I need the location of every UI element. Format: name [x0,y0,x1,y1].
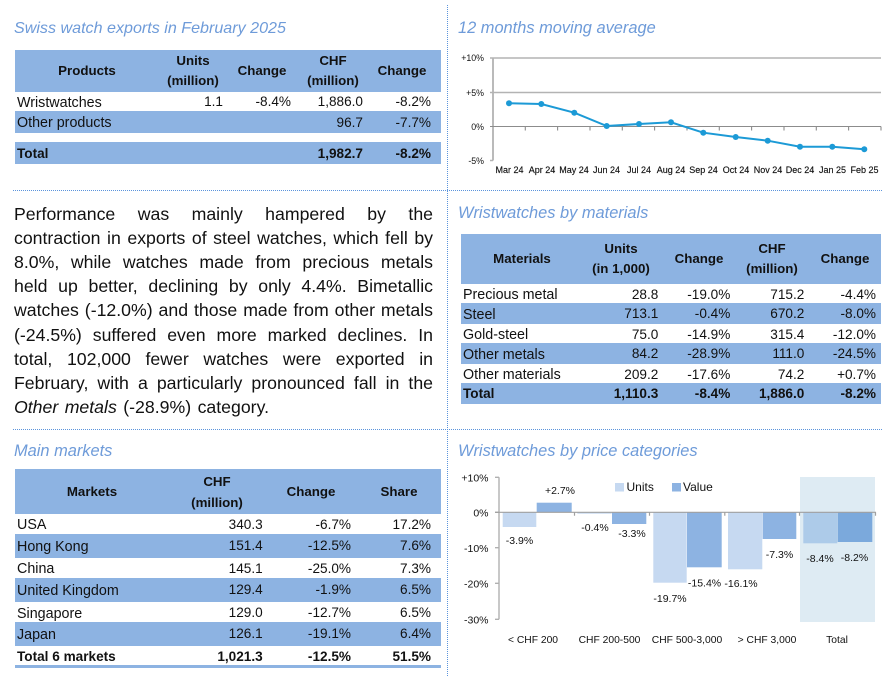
row: China: 145.1 [229,561,263,576]
row: Other materials: 209.2 [624,367,658,382]
line chart: 12 months moving average: Jan 25 [819,165,846,175]
table header row: Units [176,53,210,68]
table header row: Share [381,484,417,499]
row: Japan: Japan [17,627,56,643]
row: Steel: -8.0% [840,306,876,321]
row: Other materials [463,367,876,383]
table header row: CHF [319,53,347,68]
row: China: China [17,561,54,577]
bar chart: price categories: -3.9% [506,535,533,547]
bar chart: price categories: +10% [461,472,488,484]
table header row: (million) [167,73,219,88]
row: Gold-steel [463,327,876,343]
heading: Main markets: Main markets [14,442,112,460]
heading: Swiss watch exports in February 2025: Swiss watch exports in February 2025 [14,19,286,37]
row: Steel: 713.1 [624,306,658,321]
row: Japan: -19.1% [308,626,351,641]
row: Gold-steel: -12.0% [833,327,876,342]
line chart: 12 months moving average: 0% [471,122,484,132]
bar chart: price categories: -8.2% [841,552,868,564]
text block: performance commentary: held up better, declining by only 4.4%. Bimetallic [14,276,433,296]
text block: performance commentary: (-24.5%) suffered even more marked declines. In [14,325,433,345]
table header row: Change [821,251,869,266]
row: USA: 340.3 [229,517,263,532]
row: Total 6 markets: 1,021.3 [217,649,263,664]
table header row: (million) [191,495,243,510]
table header row: Materials [493,251,551,266]
row: Steel: -0.4% [695,306,730,321]
row: USA: 17.2% [392,517,431,532]
table header row: Markets [67,484,117,499]
row: Hong Kong: Hong Kong [17,539,89,555]
row: Other metals: -28.9% [687,346,730,361]
row: Other products: -7.7% [395,115,431,130]
line chart: 12 months moving average: -5% [468,156,484,166]
panel: Swiss watch exports [14,19,441,164]
line chart: 12 months moving average: Dec 24 [786,165,814,175]
row: Wristwatches: 1,886.0 [318,94,363,109]
row: Hong Kong: 151.4 [229,538,263,553]
text block: performance commentary: Performance was mainly hampered by the [14,204,433,224]
table header row: (in 1,000) [592,261,650,276]
row: United Kingdom: -1.9% [315,582,351,597]
line chart: 12 months moving average: Sep 24 [689,165,718,175]
panel: Wristwatches by materials [458,204,881,404]
bar chart: price categories: -0.4% [581,522,609,534]
table header row: Change [675,251,723,266]
line chart: 12 months moving average: Oct 24 [723,165,749,175]
row: Total: Total [17,146,48,161]
line chart: 12 months moving average: Apr 24 [529,165,555,175]
bar chart: price categories: -16.1% [724,578,758,590]
row: Precious metal: -19.0% [687,287,730,302]
row: Total [461,383,881,404]
table: markets [15,469,441,668]
row: Gold-steel: 75.0 [632,327,658,342]
table: products [15,50,441,164]
bar chart: price categories: > CHF 3,000 [738,635,797,646]
heading: 12 months moving average: 12 months moving average [458,19,656,37]
row: Japan: 126.1 [229,626,263,641]
table header row: Units [604,241,638,256]
row: Wristwatches: 1.1 [204,94,223,109]
bar chart: price categories: Value [683,480,713,494]
row: USA [17,517,431,533]
row: USA: USA [17,517,46,533]
line chart: 12 months moving average: +10% [461,53,484,63]
row: Singapore: 6.5% [400,605,431,620]
row: Other products: Other products [17,115,112,131]
table: materials [461,234,881,404]
bar chart: price categories: CHF 200-500 [579,635,641,646]
row: Wristwatches: -8.2% [395,94,431,109]
row: Precious metal: -4.4% [840,287,876,302]
row: Other products: 96.7 [337,115,363,130]
bar chart: price categories: +2.7% [545,485,575,497]
text block: performance commentary: total, 102,000 fewer watches were exported in [14,349,433,369]
bar chart: price categories: -15.4% [688,578,721,590]
row: Total: -8.4% [695,386,730,401]
table header row [461,234,881,284]
row: United Kingdom: 6.5% [400,582,431,597]
bar chart: price categories: < CHF 200 [508,635,558,646]
row: Hong Kong [15,534,441,558]
row: Other metals [461,343,881,364]
text block: performance commentary: February, with a particularly pronounced fall in the [14,373,433,393]
row: Gold-steel: 315.4 [770,327,804,342]
row: Total: 1,110.3 [614,386,658,401]
row: Japan [15,622,441,646]
bar chart: price categories: -7.3% [766,549,793,561]
row: Total 6 markets: Total 6 markets [17,649,116,664]
text block: performance commentary: Other metals (-28.9%) category. [14,397,269,417]
row: Steel: 670.2 [770,306,804,321]
row: Other materials: -17.6% [687,367,730,382]
line chart: 12 months moving average: Jun 24 [593,165,620,175]
row: Total 6 markets: -12.5% [308,649,351,664]
text block: performance commentary: watches (-12.0%) and those made from other metals [14,300,433,320]
row: Other materials: 74.2 [778,367,804,382]
row: Total [15,142,441,164]
row: Steel: Steel [463,307,496,323]
row: United Kingdom: United Kingdom [17,583,119,599]
bar chart: price categories: -10% [464,543,488,555]
bar chart: price categories: -8.4% [806,553,834,565]
row: Precious metal: Precious metal [463,287,558,303]
row: Singapore: -12.7% [308,605,351,620]
row: Other metals: -24.5% [833,346,876,361]
table header row [15,469,441,514]
row: Other metals: 111.0 [772,346,804,361]
line chart: 12 months moving average: Jul 24 [627,165,651,175]
row: China [17,561,431,577]
line chart: 12 months moving average: Nov 24 [754,165,782,175]
row: Steel [461,303,881,324]
row: Total: -8.2% [395,146,431,161]
bar chart: price categories: -30% [464,614,488,626]
table header row: Change [378,63,426,78]
row: Wristwatches: -8.4% [255,94,291,109]
row: Other materials: Other materials [463,367,561,383]
bar chart: price categories: -3.3% [618,528,646,540]
row: Precious metal: 28.8 [632,287,658,302]
bar chart: price categories: Units [626,480,654,494]
table header row: Change [287,484,335,499]
table header row: Products [58,63,116,78]
row: Other metals: 84.2 [632,346,658,361]
heading: Wristwatches by price categories: Wristwatches by price categories [458,442,698,460]
line chart: 12 months moving average: Aug 24 [657,165,685,175]
panel: Main markets [14,442,441,668]
line chart: 12 months moving average: Feb 25 [850,165,879,175]
row: Gold-steel: Gold-steel [463,327,528,343]
row: Singapore: Singapore [17,606,82,622]
row: Total 6 markets [17,649,431,664]
bar chart: price categories: -20% [464,578,488,590]
row: Hong Kong: -12.5% [308,538,351,553]
row: United Kingdom [15,578,441,602]
line chart: 12 months moving average: May 24 [559,165,589,175]
bar chart: price categories: -19.7% [653,593,687,605]
table header row: (million) [746,261,798,276]
heading: Wristwatches by materials: Wristwatches by materials [458,204,648,222]
bar chart: price categories: 0% [473,508,488,520]
row: Precious metal: 715.2 [770,287,804,302]
line chart: 12 months moving average: +5% [466,88,484,98]
row: Other products [15,111,441,133]
line chart: 12 months moving average [461,53,882,176]
row: Precious metal [463,287,876,303]
row: Wristwatches: Wristwatches [17,95,102,111]
text block: performance commentary [14,204,433,417]
text block: performance commentary: 8.0%, while watches made from precious metals [14,252,433,272]
row: Singapore: 129.0 [229,605,263,620]
row: USA: -6.7% [315,517,351,532]
text block: performance commentary: contraction in exports of steel watches, which fell by [14,228,433,248]
bar chart: price categories: CHF 500-3,000 [652,635,722,646]
row: Total: 1,886.0 [759,386,804,401]
row: United Kingdom: 129.4 [229,582,263,597]
row: Total 6 markets: 51.5% [392,649,431,664]
row: Hong Kong: 7.6% [400,538,431,553]
table header row: Change [238,63,286,78]
row: Gold-steel: -14.9% [687,327,730,342]
row: Wristwatches [17,94,431,111]
table header row: CHF [203,474,231,489]
row: Total: Total [463,386,494,401]
table header row: CHF [758,241,786,256]
row: Total: 1,982.7 [318,146,363,161]
line chart: 12 months moving average: Mar 24 [495,165,524,175]
row: China: -25.0% [308,561,351,576]
row: Total: -8.2% [840,386,876,401]
row: Other metals: Other metals [463,347,545,363]
row: Japan: 6.4% [400,626,431,641]
table header row [15,50,441,92]
row: Other materials: +0.7% [837,367,876,382]
bar chart: price categories: Total [826,635,848,646]
table header row: (million) [307,73,359,88]
row: China: 7.3% [400,561,431,576]
row: Singapore [17,605,431,622]
